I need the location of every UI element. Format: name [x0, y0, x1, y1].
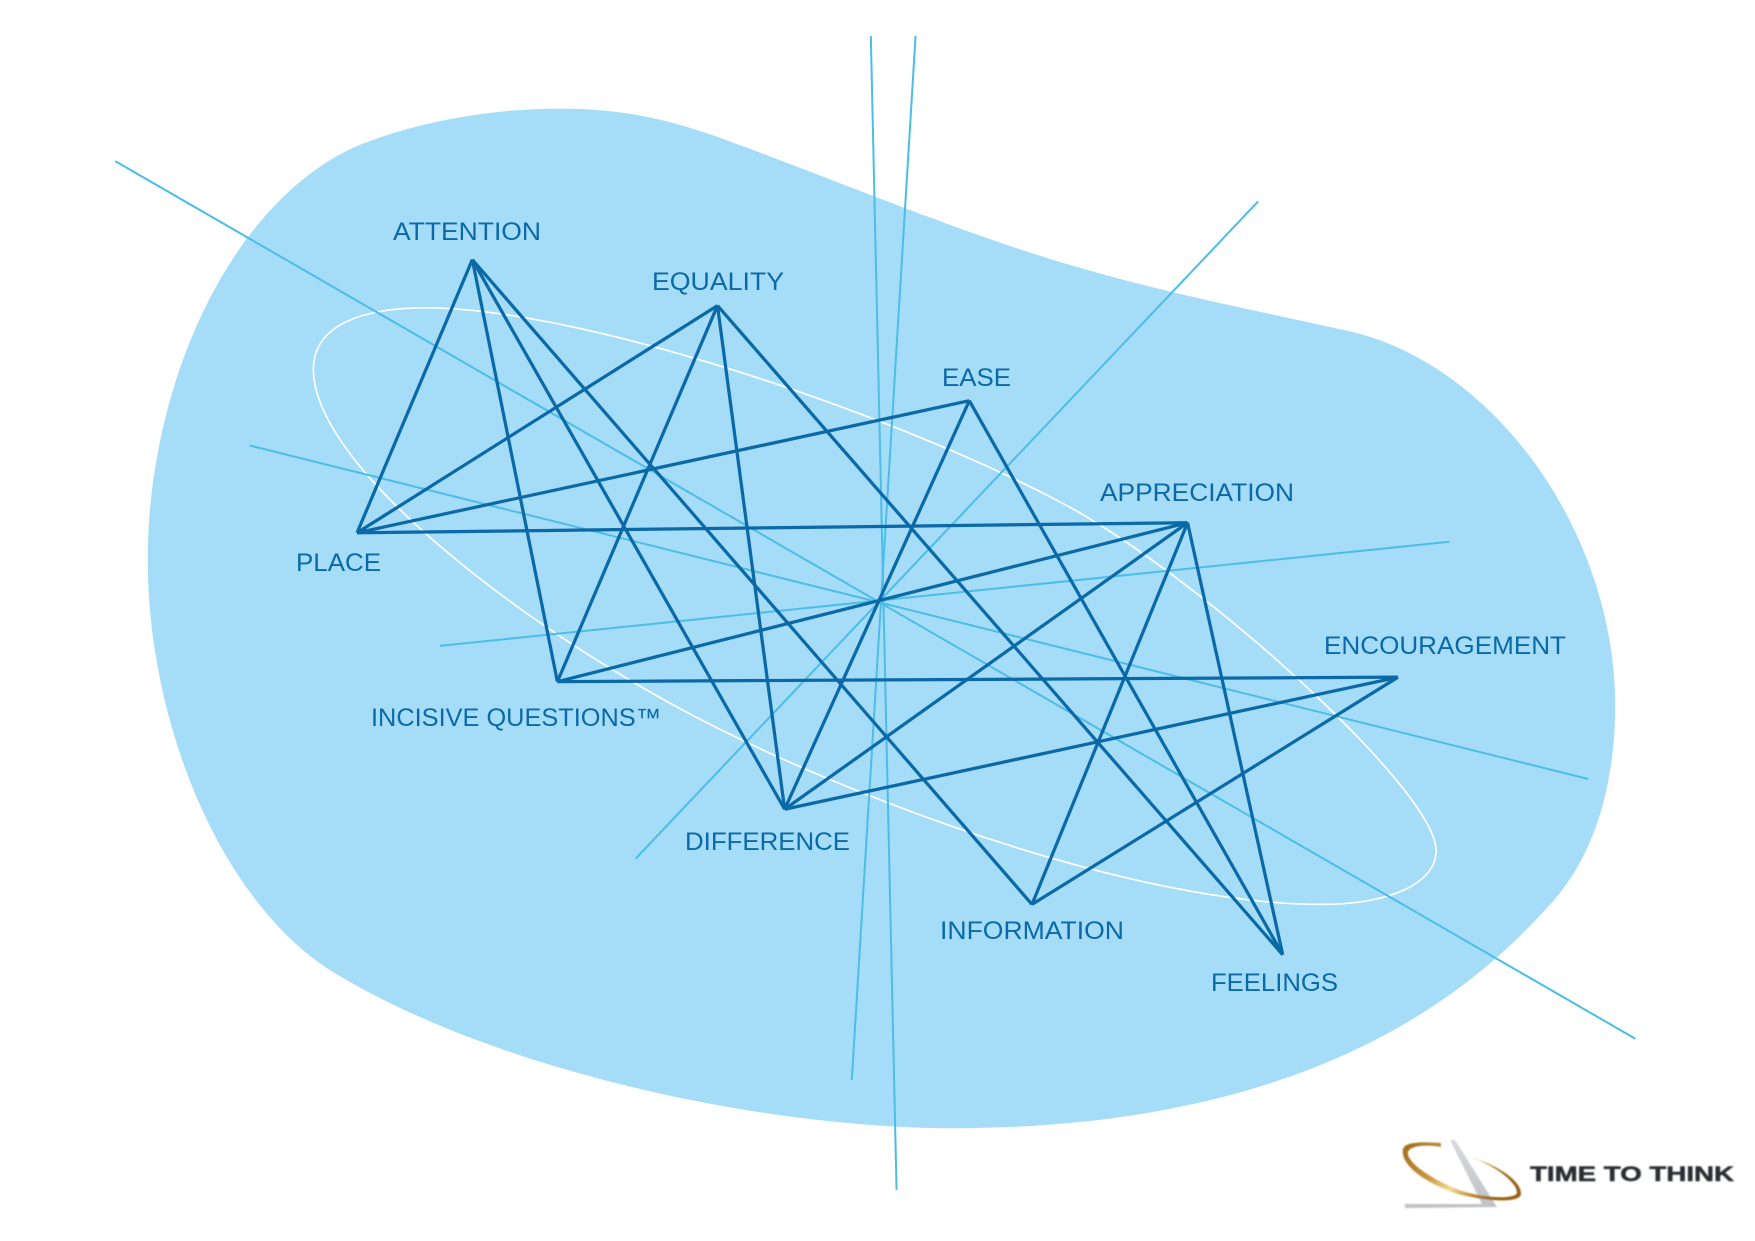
- logo icon: grey triangle and gold ring: [1403, 1140, 1521, 1208]
- label: attention: ATTENTION: [393, 218, 541, 246]
- label: encouragement: ENCOURAGEMENT: [1324, 632, 1566, 660]
- label: equality: EQUALITY: [652, 268, 784, 296]
- label: difference: DIFFERENCE: [685, 828, 850, 856]
- logo wordmark: TIME TO THINK: [1530, 1163, 1734, 1186]
- label: appreciation: APPRECIATION: [1100, 479, 1294, 507]
- component labels: [296, 218, 1566, 997]
- label: feelings: FEELINGS: [1211, 969, 1338, 997]
- white ellipse outline: [313, 308, 1436, 904]
- label: incisive questions: INCISIVE QUESTIONS™: [371, 704, 661, 732]
- network of dark lines connecting the ten components: [357, 260, 1398, 955]
- label: information: INFORMATION: [940, 917, 1124, 945]
- label: ease: EASE: [942, 364, 1011, 392]
- logo: time to think: [1403, 1140, 1734, 1208]
- label: place: PLACE: [296, 549, 381, 577]
- background blob: [148, 109, 1615, 1128]
